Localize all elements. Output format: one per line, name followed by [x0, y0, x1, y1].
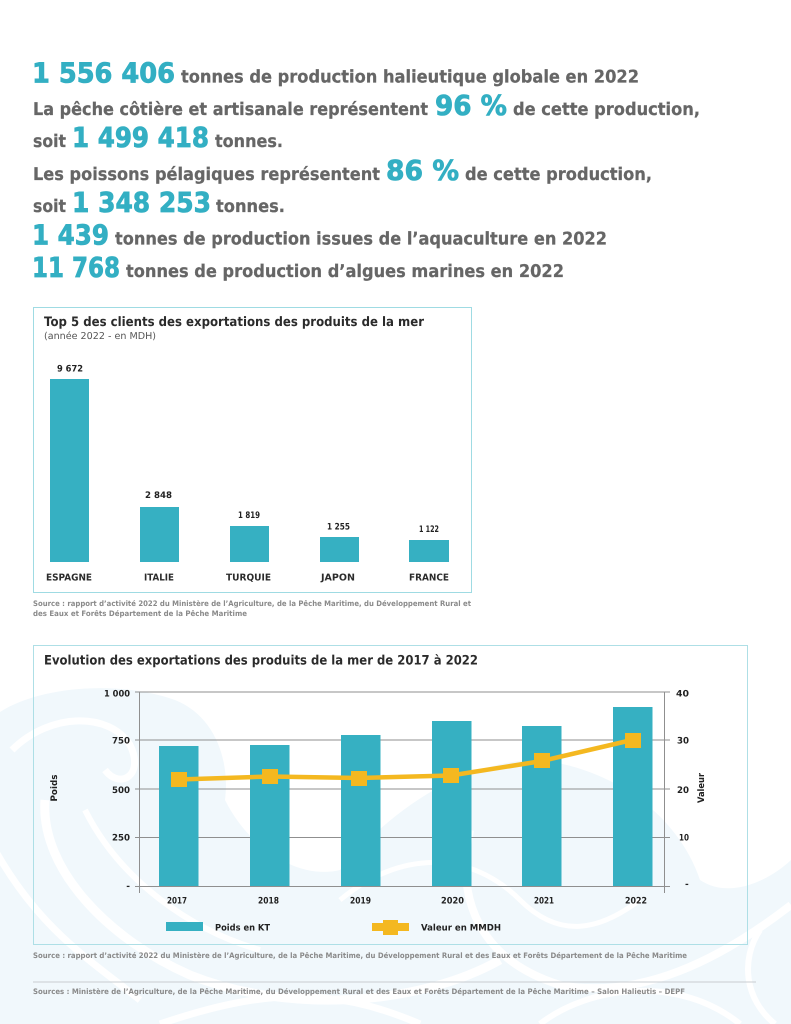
legend	[166, 920, 501, 935]
line: seaweed: 11 768	[32, 252, 120, 284]
heading: top 5 chart: Top 5 des clients des exportations des produits de la mer	[44, 315, 425, 330]
line: pelagic share	[33, 155, 652, 187]
line: coastal fishing tonnage: soit	[33, 132, 66, 152]
line: pelagic share: de cette production,	[465, 165, 652, 185]
source note: top 5 chart: Source : rapport d’activité 2022 du Ministère de l’Agriculture, de la Pêche Maritime, du Développement Rural et	[33, 599, 471, 608]
line: seaweed	[32, 252, 564, 284]
bar chart: clients: TURQUIE	[226, 572, 271, 584]
line: aquaculture	[32, 220, 607, 252]
combo chart: weight bars and value line: 2019	[350, 896, 371, 906]
legend: Valeur en MMDH	[421, 924, 501, 934]
line: pelagic tonnage: tonnes.	[216, 197, 285, 217]
source note: top 5 chart	[33, 599, 471, 618]
combo chart: weight bars and value line	[50, 690, 707, 906]
bar chart: clients: ESPAGNE	[46, 572, 92, 584]
headline figures	[32, 58, 700, 284]
combo chart: weight bars and value line: 2021	[534, 896, 554, 906]
bar chart: clients: 2 848	[145, 491, 172, 501]
line: coastal fishing share: La pêche côtière et artisanale représentent	[33, 100, 428, 120]
combo chart: weight bars and value line: Valeur	[697, 772, 707, 803]
combo chart: weight bars and value line: 2018	[258, 896, 279, 906]
combo chart: weight bars and value line: 750	[112, 736, 130, 746]
panel: top 5 export clients	[34, 308, 472, 592]
line: aquaculture: tonnes de production issues de l’aquaculture en 2022	[115, 230, 607, 250]
combo chart: weight bars and value line: 20	[677, 786, 689, 796]
line: coastal fishing tonnage	[33, 122, 283, 154]
heading: evolution chart: Evolution des exportations des produits de la mer de 2017 à 2022	[44, 654, 478, 668]
line: coastal fishing share: 96 %	[435, 90, 507, 122]
bar chart: clients: 1 255	[327, 522, 350, 532]
source note: evolution chart: Source : rapport d’activité 2022 du Ministère de l’Agriculture, de la Pêche Maritime, du Développement Rural et des Eaux et Forêts Département de la Pêche Maritime	[33, 951, 687, 960]
subheading: year and unit: (année 2022 - en MDH)	[44, 331, 156, 342]
bar chart: clients: 1 122	[419, 525, 439, 535]
bar chart: clients: ITALIE	[144, 572, 174, 584]
bar chart: clients	[46, 364, 449, 584]
combo chart: weight bars and value line: -	[685, 880, 689, 890]
line: global production	[32, 58, 639, 90]
line: seaweed: tonnes de production d’algues marines en 2022	[126, 262, 564, 282]
line: aquaculture: 1 439	[32, 220, 109, 252]
combo chart: weight bars and value line: 1 000	[104, 690, 130, 700]
line: coastal fishing tonnage: 1 499 418	[72, 122, 209, 154]
combo chart: weight bars and value line: 30	[677, 736, 689, 746]
source note: top 5 chart: des Eaux et Forêts Département de la Pêche Maritime	[33, 609, 247, 618]
line: global production: tonnes de production halieutique globale en 2022	[181, 68, 639, 88]
line: pelagic tonnage: 1 348 253	[72, 187, 211, 219]
line: pelagic share: 86 %	[386, 155, 459, 187]
line: pelagic tonnage	[33, 187, 285, 219]
panel: export evolution	[34, 646, 748, 944]
combo chart: weight bars and value line: 10	[679, 834, 689, 844]
bar chart: clients: 1 819	[238, 511, 260, 521]
line: global production: 1 556 406	[32, 58, 175, 90]
combo chart: weight bars and value line: 2020	[441, 896, 464, 906]
combo chart: weight bars and value line: 500	[112, 786, 130, 796]
combo chart: weight bars and value line: -	[126, 882, 130, 892]
bar chart: clients: JAPON	[320, 572, 355, 584]
bar chart: clients: 9 672	[57, 364, 83, 374]
line: coastal fishing share	[33, 90, 700, 122]
combo chart: weight bars and value line: Poids	[50, 774, 60, 802]
legend: Poids en KT	[215, 924, 271, 934]
combo chart: weight bars and value line: 250	[112, 834, 130, 844]
bar chart: clients: FRANCE	[409, 572, 449, 584]
combo chart: weight bars and value line: 2017	[167, 896, 187, 906]
line: coastal fishing tonnage: tonnes.	[215, 132, 283, 152]
line: pelagic tonnage: soit	[33, 197, 66, 217]
line: pelagic share: Les poissons pélagiques représentent	[33, 165, 380, 185]
combo chart: weight bars and value line: 2022	[625, 896, 647, 906]
footer sources: Sources : Ministère de l’Agriculture, de la Pêche Maritime, du Développement Rural et des Eaux et Forêts Département de la Pêche Maritime – Salon Halieutis – DEPF	[33, 987, 685, 996]
background: pale wave pattern	[0, 688, 791, 1024]
line: coastal fishing share: de cette production,	[513, 100, 700, 120]
combo chart: weight bars and value line: 40	[676, 690, 689, 700]
